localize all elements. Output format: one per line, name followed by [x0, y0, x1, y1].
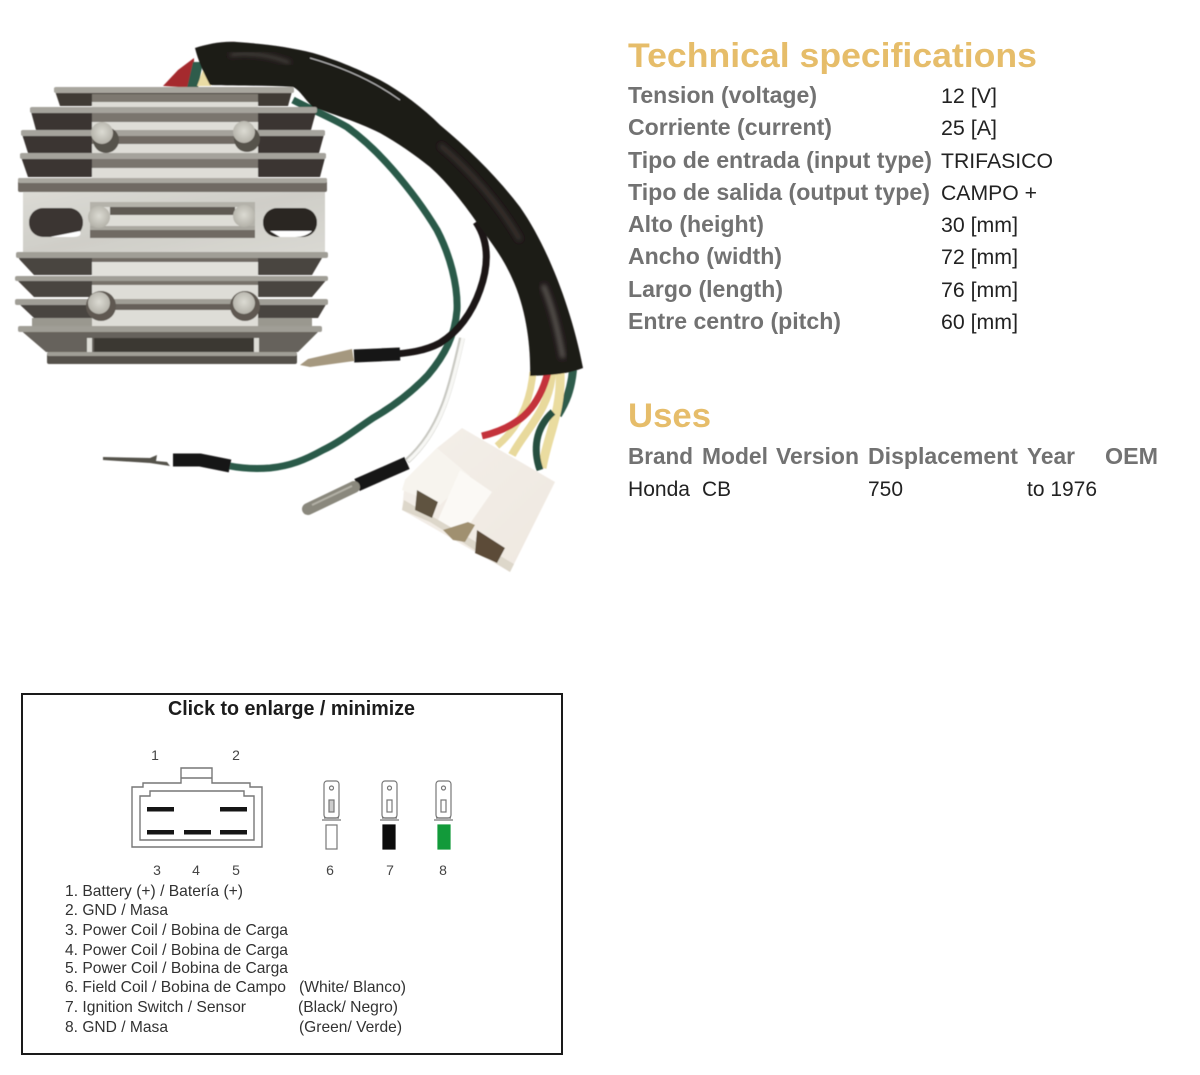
row: height: 30 [mm]	[941, 214, 1018, 237]
row: length: Largo (length)	[628, 276, 783, 302]
row: pitch	[628, 308, 1018, 334]
fin 9	[18, 328, 322, 352]
connector pin numbers: 8	[439, 862, 447, 878]
uses header row: Version	[776, 443, 859, 469]
row: width: Ancho (width)	[628, 243, 782, 269]
fin 4	[20, 154, 326, 177]
row: height: Alto (height)	[628, 211, 764, 237]
row: width	[628, 243, 1018, 269]
product photo: regulator with wiring harness	[15, 42, 583, 572]
fin 10	[47, 352, 297, 364]
uses header row: Model	[702, 443, 768, 469]
connector pin numbers: 6	[326, 862, 334, 878]
terminal 6: white wire	[322, 781, 341, 849]
row: output type: CAMPO +	[941, 182, 1037, 205]
connector diagram	[132, 768, 262, 847]
white connector	[402, 428, 555, 572]
connector pin numbers	[151, 747, 447, 878]
pin legend: 8. GND / Masa	[65, 1019, 168, 1036]
row: height	[628, 211, 1018, 237]
thick black cable	[195, 42, 583, 376]
colored wires into connector	[482, 370, 573, 470]
connector pin numbers: 7	[386, 862, 394, 878]
connector pin numbers: 1	[151, 747, 159, 763]
uses header row: Year	[1027, 443, 1075, 469]
center slot	[90, 202, 255, 238]
row: current: 25 [A]	[941, 117, 997, 140]
connector pin numbers: 4	[192, 862, 200, 878]
panel title: Click to enlarge / minimize	[168, 698, 415, 720]
heat sink body	[15, 87, 328, 364]
uses table	[628, 443, 1158, 501]
pin legend: (White/ Blanco)	[299, 979, 406, 996]
plate	[23, 190, 325, 254]
row: tension: 12 [V]	[941, 85, 997, 108]
uses data row: CB	[702, 478, 731, 501]
panel: wiring diagram	[22, 694, 562, 1054]
pin legend: 2. GND / Masa	[65, 902, 168, 919]
uses data row: to 1976	[1027, 478, 1097, 501]
connector pin numbers: 5	[232, 862, 240, 878]
heading: uses: Uses	[628, 397, 711, 435]
pin legend: 1. Battery (+) / Batería (+)	[65, 883, 243, 900]
fin 2	[30, 108, 317, 130]
green wire sleeve and terminal	[103, 455, 230, 466]
row: pitch: 60 [mm]	[941, 311, 1018, 334]
row: length	[628, 276, 1018, 302]
row: pitch: Entre centro (pitch)	[628, 308, 841, 334]
bolts	[93, 127, 119, 153]
row: tension	[628, 82, 997, 108]
connector pin numbers: 2	[232, 747, 240, 763]
row: output type: Tipo de salida (output type)	[628, 179, 930, 205]
pin legend: 4. Power Coil / Bobina de Carga	[65, 942, 288, 959]
pin legend: 3. Power Coil / Bobina de Carga	[65, 922, 288, 939]
terminal 7: black wire	[380, 781, 399, 849]
row: tension: Tension (voltage)	[628, 82, 817, 108]
row: current	[628, 114, 997, 140]
pin legend: (Green/ Verde)	[299, 1019, 402, 1036]
uses header row	[628, 443, 1158, 469]
row: current: Corriente (current)	[628, 114, 832, 140]
fin 1	[54, 88, 293, 106]
uses data row: 750	[868, 478, 903, 501]
fin 8	[16, 301, 328, 318]
uses header row: Brand	[628, 443, 693, 469]
uses header row: Displacement	[868, 443, 1018, 469]
uses header row: OEM	[1105, 443, 1158, 469]
white wire	[407, 338, 463, 461]
pin legend: 7. Ignition Switch / Sensor	[65, 999, 247, 1016]
fin 3	[21, 131, 325, 153]
uses data row: Honda	[628, 478, 690, 501]
row: length: 76 [mm]	[941, 279, 1018, 302]
row: input type: TRIFASICO	[941, 150, 1053, 173]
pin legend: 6. Field Coil / Bobina de Campo	[65, 979, 286, 996]
black wire	[385, 222, 486, 355]
title: technical specifications: Technical specifications	[628, 37, 1037, 75]
fin 7	[15, 278, 328, 297]
terminal 8: green wire	[434, 781, 453, 849]
row: width: 72 [mm]	[941, 246, 1018, 269]
pin legend: (Black/ Negro)	[298, 999, 398, 1016]
wires behind heat sink	[163, 58, 211, 88]
connector pin numbers: 3	[153, 862, 161, 878]
white wire sleeve and terminal	[308, 463, 407, 509]
uses data row	[628, 478, 1097, 501]
fin 6	[16, 254, 328, 275]
mounting slots	[29, 208, 83, 237]
green wire	[230, 100, 457, 468]
spec table	[628, 82, 1053, 334]
pin legend: 5. Power Coil / Bobina de Carga	[65, 960, 288, 977]
pin legend	[65, 883, 406, 1036]
black wire sleeve and terminal	[300, 349, 400, 367]
row: input type: Tipo de entrada (input type)	[628, 147, 932, 173]
